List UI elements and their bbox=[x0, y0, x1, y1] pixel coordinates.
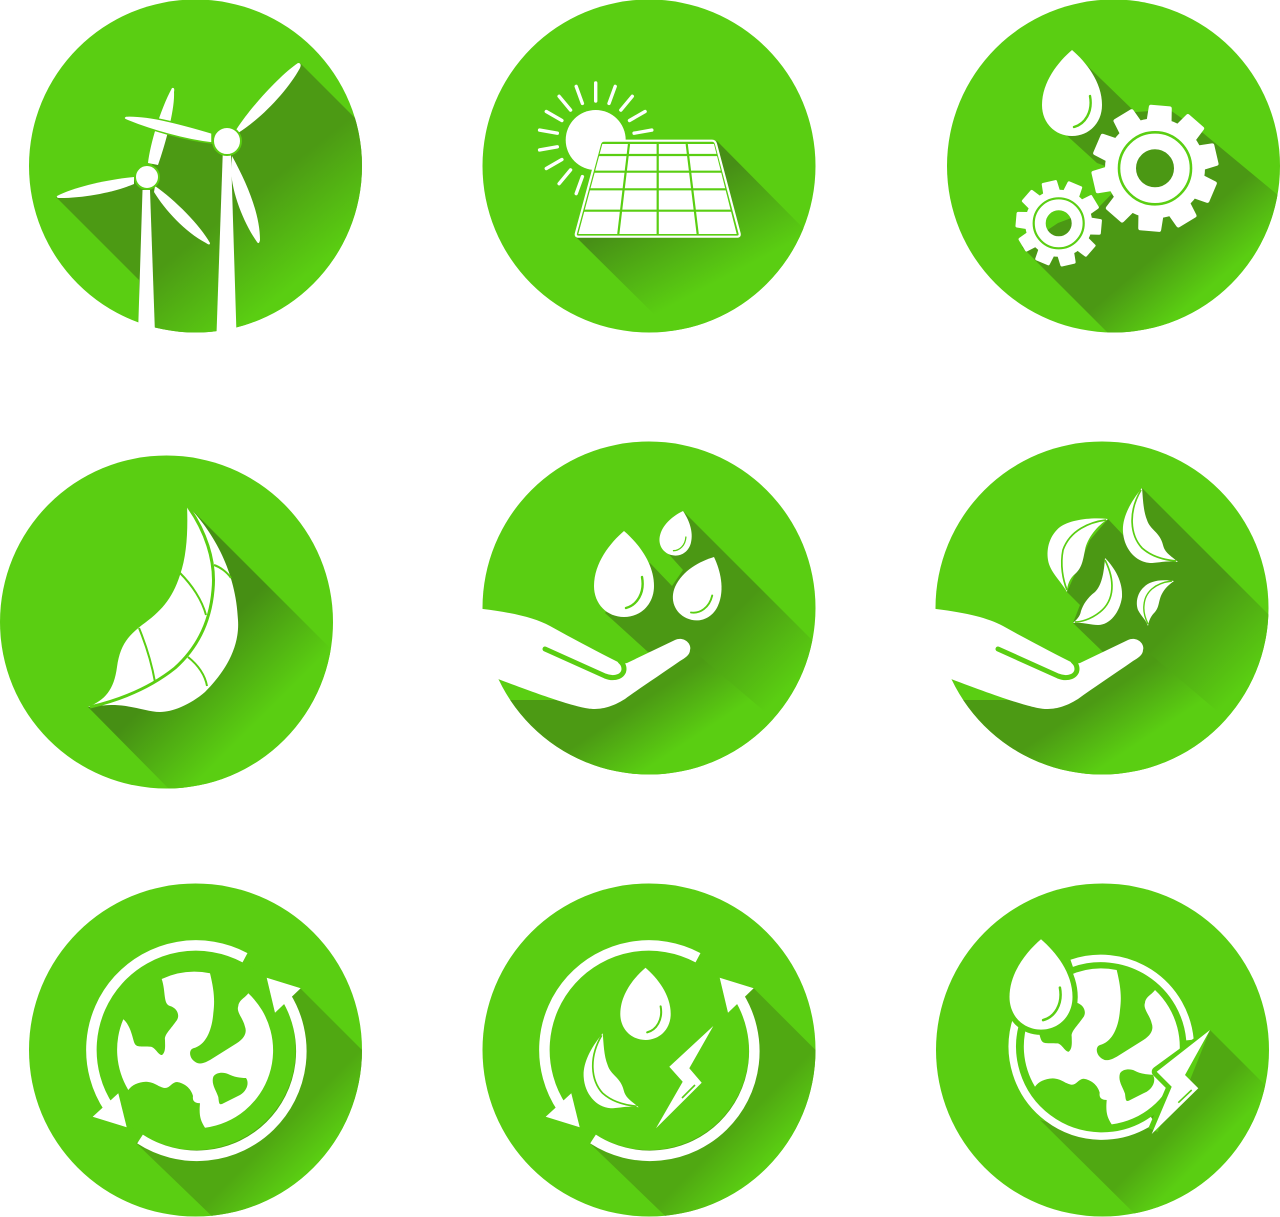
ring bbox=[1012, 958, 1190, 1136]
small drop bbox=[656, 507, 698, 559]
circular arrows bbox=[91, 945, 301, 1156]
icon: water drop and gears bbox=[947, 0, 1280, 340]
leaf veins bbox=[90, 505, 231, 707]
globe bbox=[1024, 968, 1180, 1124]
icon: wind turbines bbox=[29, 0, 362, 332]
globe bbox=[117, 972, 273, 1128]
sun bbox=[540, 83, 652, 194]
icon: hand with leaves bbox=[936, 442, 1268, 774]
leaf left bbox=[1048, 518, 1108, 592]
leaf blade bbox=[88, 505, 238, 712]
icon: earth with recycle arrows bbox=[29, 884, 370, 1217]
icon: cycle of water, leaf and energy bbox=[482, 884, 824, 1217]
circular arrows bbox=[544, 945, 754, 1156]
lightning bolt bbox=[656, 1026, 713, 1128]
icon: earth with drop and lightning bbox=[936, 884, 1280, 1217]
water drop bbox=[620, 968, 671, 1040]
hand bbox=[478, 608, 690, 709]
large turbine bbox=[124, 63, 301, 334]
solar panel bbox=[576, 141, 740, 237]
lightning bolt bbox=[1152, 1030, 1210, 1134]
leaf small right bbox=[1137, 580, 1174, 626]
leaf bbox=[584, 1033, 639, 1108]
leaf top right bbox=[1123, 488, 1178, 563]
icon: leaf bbox=[0, 456, 345, 800]
icon: sun and solar panel bbox=[482, 0, 816, 332]
large gear bbox=[1086, 100, 1224, 237]
small gear bbox=[1007, 172, 1111, 275]
hand bbox=[931, 608, 1143, 709]
water drop bbox=[1010, 939, 1072, 1030]
icon: hand with water drops bbox=[482, 442, 816, 774]
large drop bbox=[594, 531, 654, 617]
medium drop bbox=[665, 547, 735, 628]
small turbine bbox=[57, 88, 210, 334]
water drop bbox=[1042, 50, 1102, 136]
leaf bottom centre bbox=[1073, 558, 1122, 625]
